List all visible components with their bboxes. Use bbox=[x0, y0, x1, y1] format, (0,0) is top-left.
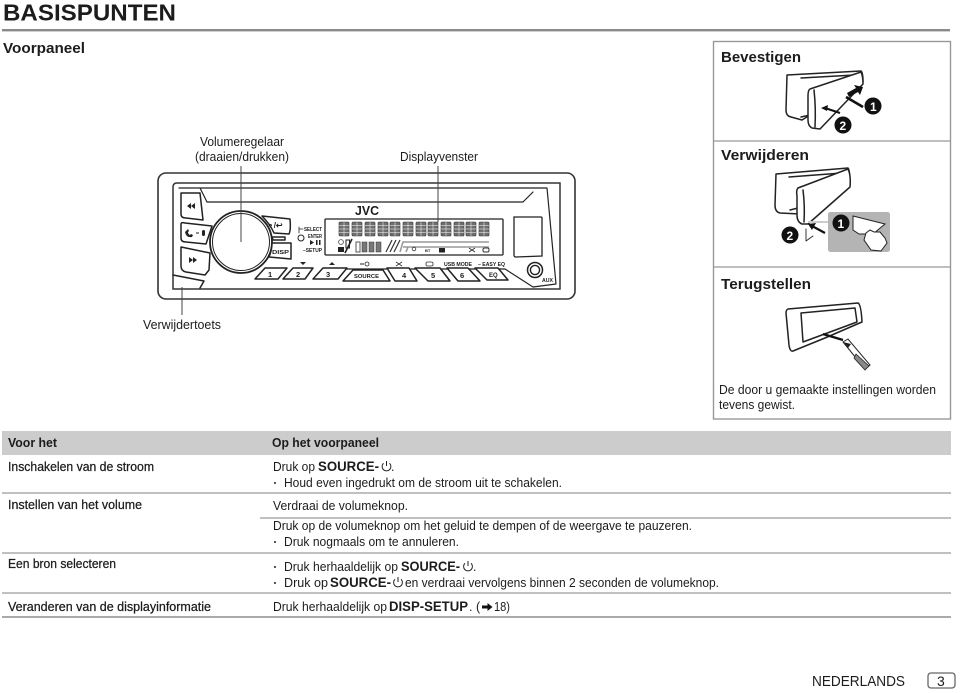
illustration: detach faceplate: 1 bbox=[838, 217, 844, 231]
left column: Veranderen van de displayinformatie bbox=[8, 600, 211, 614]
footer: page number: 3 bbox=[937, 673, 945, 689]
row: source bbox=[274, 559, 719, 590]
left buttons bbox=[181, 193, 212, 275]
select / enter labels: SELECT bbox=[304, 227, 322, 233]
row: display info: 18) bbox=[494, 600, 510, 614]
row: power: Druk op bbox=[273, 460, 315, 474]
footer: page number bbox=[928, 673, 955, 689]
row: power: Houd even ingedrukt om de stroom uit te schakelen. bbox=[284, 476, 562, 490]
volume knob bbox=[210, 211, 272, 273]
row: source: en verdraai vervolgens binnen 2 seconden de volumeknop. bbox=[405, 576, 719, 590]
small buttons next to knob: ⚬/↩ bbox=[267, 221, 283, 230]
heading: Terugstellen: Terugstellen bbox=[721, 277, 811, 293]
row: display info: . ( bbox=[469, 600, 481, 614]
preset buttons: SOURCE bbox=[354, 274, 380, 280]
radio front panel illustration bbox=[158, 166, 575, 315]
row: source: Druk op bbox=[284, 576, 328, 590]
heading: Verwijderen: Verwijderen bbox=[721, 148, 809, 164]
left column bbox=[8, 460, 211, 614]
select / enter labels: –SETUP bbox=[303, 248, 323, 254]
row: source: SOURCE- bbox=[330, 575, 391, 590]
title: BASISPUNTEN bbox=[3, 0, 176, 26]
preset buttons: 2 bbox=[296, 270, 300, 279]
leader lines bbox=[182, 166, 438, 315]
step 2 marker bbox=[834, 116, 852, 134]
small buttons next to knob bbox=[262, 216, 291, 259]
preset buttons: 1 bbox=[268, 270, 272, 279]
illustration: attach faceplate: 1 bbox=[870, 100, 877, 114]
callout: press release button bbox=[828, 212, 890, 252]
row: display info: Druk herhaaldelijk op bbox=[273, 600, 387, 614]
JVC logo: JVC bbox=[355, 204, 379, 218]
disc slot and AUX jack: AUX bbox=[542, 278, 554, 284]
display: BT bbox=[425, 248, 431, 253]
row: power bbox=[273, 459, 562, 490]
illustration: attach faceplate bbox=[786, 71, 882, 134]
footer: language: NEDERLANDS bbox=[812, 673, 905, 690]
note text: De door u gemaakte instellingen worden bbox=[719, 383, 936, 397]
row: display info: DISP-SETUP bbox=[389, 599, 468, 614]
row: source: SOURCE- bbox=[401, 559, 460, 574]
step 2 marker bbox=[782, 226, 798, 244]
illustration: detach faceplate: 2 bbox=[786, 229, 794, 243]
table header: Op het voorpaneel bbox=[272, 436, 379, 450]
outer frame bbox=[158, 173, 575, 299]
label: volume control: Volumeregelaar bbox=[200, 135, 284, 149]
row: volume: Druk nogmaals om te annuleren. bbox=[284, 535, 459, 549]
illustration: detach faceplate bbox=[775, 168, 890, 252]
row: source: Druk herhaaldelijk op bbox=[284, 560, 398, 574]
arrow 2 bbox=[825, 108, 840, 113]
preset buttons: 4 bbox=[402, 271, 407, 280]
row: volume: Druk op de volumeknop om het geluid te dempen of de weergave te pauzeren. bbox=[273, 519, 692, 533]
label: volume control bbox=[195, 135, 289, 164]
label: display window: Displayvenster bbox=[400, 150, 478, 164]
illustration: reset with pen bbox=[786, 303, 870, 370]
left column: Inschakelen van de stroom bbox=[8, 460, 154, 474]
table header bbox=[2, 431, 951, 455]
illustration: attach faceplate: 2 bbox=[840, 119, 846, 133]
heading: Voorpaneel: Voorpaneel bbox=[3, 40, 85, 57]
display bbox=[325, 219, 503, 255]
select / enter labels bbox=[298, 227, 323, 254]
row: volume: Verdraai de volumeknop. bbox=[273, 499, 408, 513]
step 1 marker bbox=[832, 214, 850, 232]
arrow 1 bbox=[847, 85, 863, 97]
left column: Een bron selecteren bbox=[8, 557, 116, 571]
note text: tevens gewist. bbox=[719, 398, 795, 412]
small buttons next to knob: DISP bbox=[272, 250, 290, 256]
row: display info bbox=[273, 599, 510, 614]
preset buttons: 5 bbox=[431, 271, 435, 280]
note text bbox=[719, 383, 936, 412]
label: detach button: Verwijdertoets bbox=[143, 318, 221, 332]
preset buttons: 3 bbox=[326, 270, 330, 279]
table: basic operations bbox=[2, 431, 951, 618]
label: volume control: (draaien/drukken) bbox=[195, 150, 289, 164]
preset buttons: 6 bbox=[460, 271, 464, 280]
select / enter labels: ENTER bbox=[308, 234, 322, 240]
table header: Voor het bbox=[8, 436, 58, 450]
row: power: . bbox=[391, 460, 394, 474]
heading: Bevestigen: Bevestigen bbox=[721, 50, 801, 66]
preset buttons: EQ bbox=[489, 273, 498, 279]
arrow bbox=[812, 226, 825, 233]
preset buttons: USB MODE bbox=[444, 262, 473, 268]
panel: attach / detach / reset bbox=[713, 42, 951, 419]
preset buttons bbox=[255, 262, 508, 281]
step 1 marker bbox=[864, 98, 882, 114]
disc slot and AUX jack bbox=[514, 217, 554, 284]
row: volume bbox=[273, 499, 692, 549]
row: power: SOURCE- bbox=[318, 459, 379, 474]
row: source: . bbox=[473, 560, 476, 574]
preset buttons: – EASY EQ bbox=[478, 262, 505, 268]
left column: Instellen van het volume bbox=[8, 498, 142, 512]
